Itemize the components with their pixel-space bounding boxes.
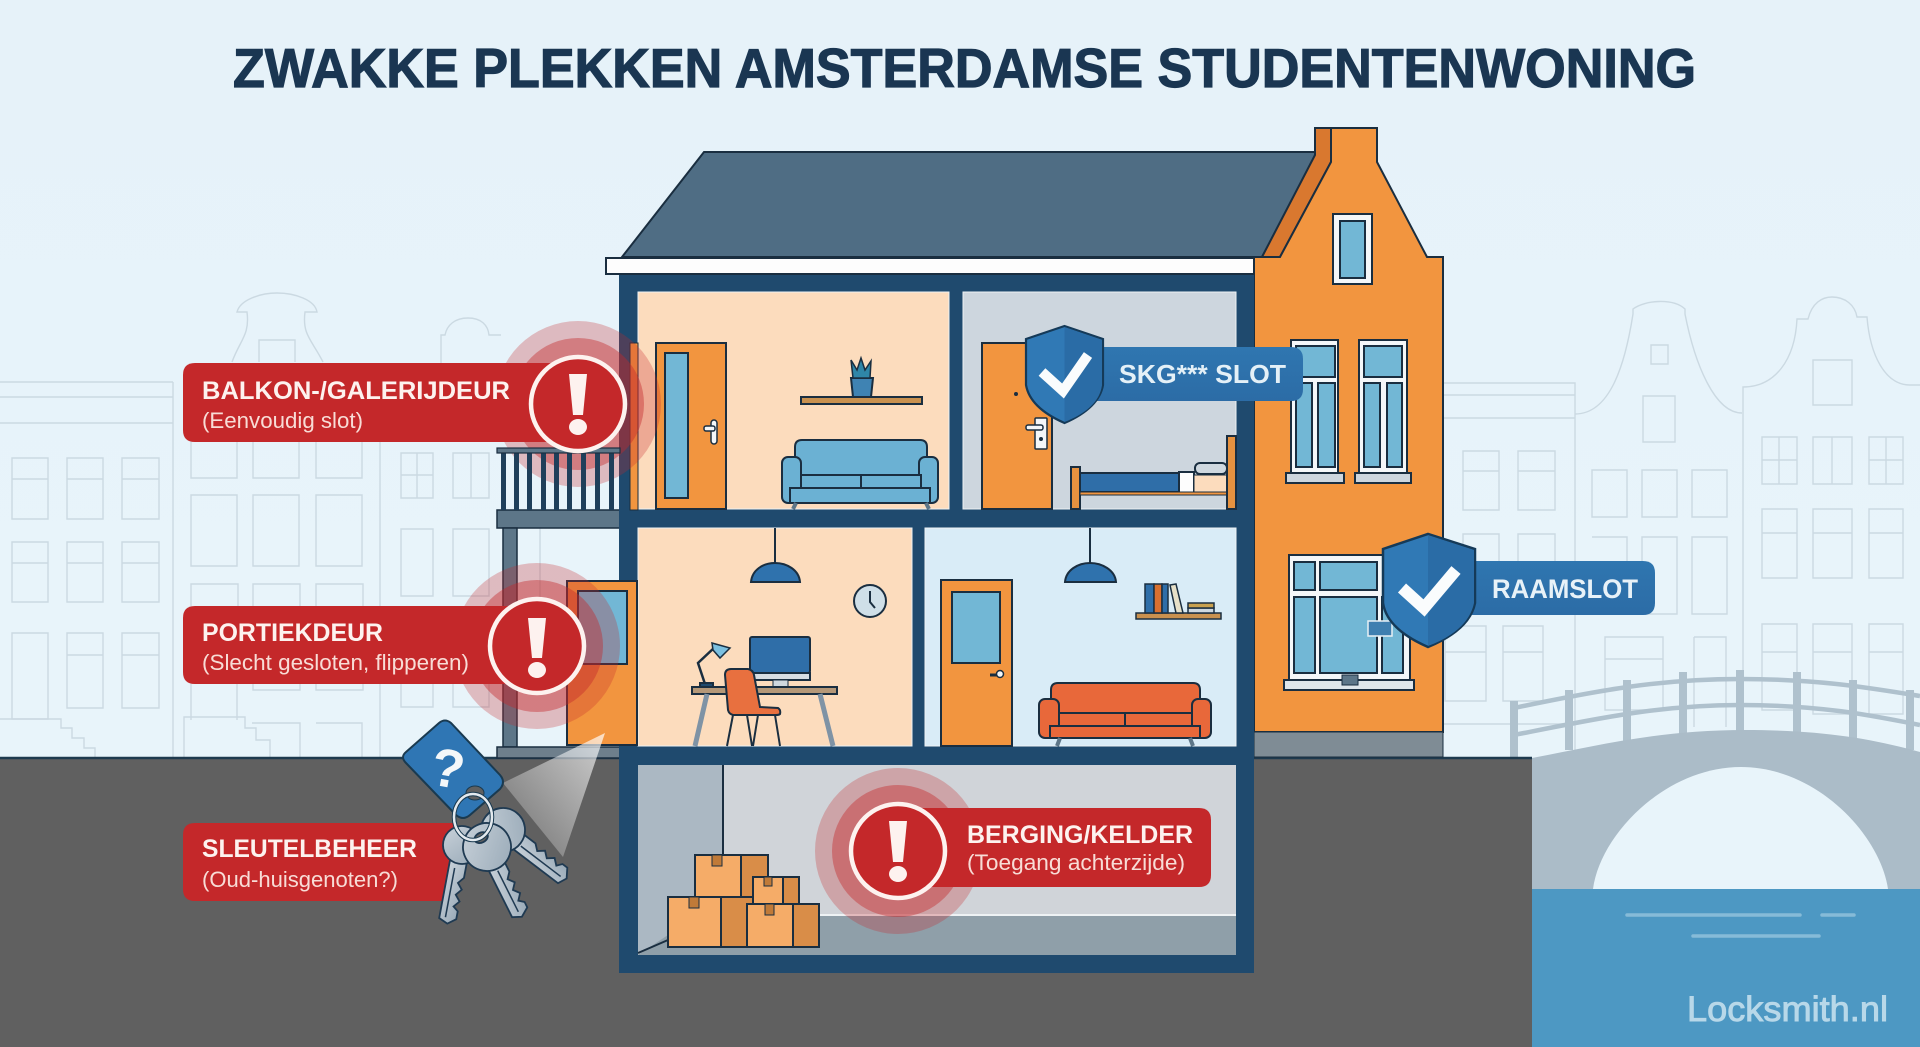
roof <box>622 152 1318 257</box>
room: middle left <box>638 528 912 746</box>
callout: raamslot <box>1383 534 1655 647</box>
middle right room furniture <box>941 528 1221 746</box>
room: middle right <box>925 528 1236 746</box>
room: upper right <box>963 292 1236 509</box>
orange sofa <box>1039 683 1211 746</box>
callout: berging/kelder: BERGING/KELDER <box>967 821 1193 849</box>
upper left window <box>1286 340 1344 483</box>
callout: balkon-/galerijdeur: BALKON-/GALERIJDEUR <box>202 377 510 405</box>
icon: keys with question tag <box>403 720 580 927</box>
icon: shield check <box>1383 534 1475 647</box>
icon: warning portiek <box>490 599 584 693</box>
ceiling lamp <box>751 528 800 582</box>
icon: warning balkon <box>531 357 625 451</box>
brand logo: Locksmith.nl <box>1687 990 1888 1029</box>
callout: portiekdeur <box>183 599 584 693</box>
orange gable building <box>1254 128 1443 757</box>
title: ZWAKKE PLEKKEN AMSTERDAMSE STUDENTENWONING <box>233 37 1696 99</box>
alert glow: berging <box>815 768 981 934</box>
white cornice <box>606 258 1254 274</box>
room: basement <box>638 765 1236 955</box>
door <box>941 580 1012 746</box>
blue sofa <box>782 440 938 509</box>
callout: berging/kelder <box>851 804 1211 898</box>
light cone <box>503 733 605 857</box>
key tag: ? <box>426 737 469 801</box>
callout: SKG slot <box>1026 326 1303 423</box>
book shelf <box>1136 584 1221 619</box>
door <box>656 343 726 509</box>
portiek door <box>567 581 637 745</box>
balcony railing <box>497 448 620 510</box>
house structure with rooms <box>606 258 1254 973</box>
alert glow: portiek <box>454 563 620 729</box>
door with SKG lock <box>982 343 1052 509</box>
key ring <box>454 794 492 840</box>
callout: berging/kelder: (Toegang achterzijde) <box>967 850 1185 875</box>
middle left room furniture <box>692 528 886 746</box>
callout: sleutelbeheer: SLEUTELBEHEER <box>202 835 417 863</box>
alert glow: balkon <box>495 321 661 487</box>
callout: SKG slot: SKG*** SLOT <box>1119 359 1286 389</box>
callout: balkon-/galerijdeur <box>183 357 625 451</box>
door sliver balcony <box>630 343 638 510</box>
background skyline right <box>1443 297 1920 758</box>
callout: balkon-/galerijdeur: (Eenvoudig slot) <box>202 408 363 433</box>
monitor <box>750 637 810 687</box>
clock <box>854 585 886 617</box>
balcony slab and post <box>497 510 620 758</box>
key tag <box>403 720 503 818</box>
key right <box>472 799 580 896</box>
icon: warning berging <box>851 804 945 898</box>
storage boxes <box>668 855 819 947</box>
chair <box>725 669 780 746</box>
background skyline left <box>0 293 540 758</box>
callout: portiekdeur: PORTIEKDEUR <box>202 619 383 647</box>
upper right window <box>1355 340 1411 483</box>
bridge <box>1510 670 1920 889</box>
desk <box>692 687 837 746</box>
callout: raamslot: RAAMSLOT <box>1492 574 1638 604</box>
key middle <box>455 815 543 927</box>
gable window <box>1333 214 1372 284</box>
callout: sleutelbeheer <box>183 823 455 901</box>
street ground <box>0 758 1532 1047</box>
ceiling lamp <box>1065 528 1116 582</box>
room: upper left <box>638 292 949 509</box>
lower window with lock <box>1284 555 1414 690</box>
desk lamp <box>698 643 730 687</box>
shelf with plant <box>801 358 922 404</box>
icon: shield check <box>1026 326 1103 423</box>
key left <box>429 823 484 927</box>
upper right room furniture <box>982 343 1236 509</box>
callout: portiekdeur: (Slecht gesloten, flipperen) <box>202 650 469 675</box>
canal water <box>1532 889 1920 1047</box>
callout: sleutelbeheer: (Oud-huisgenoten?) <box>202 867 398 892</box>
upper left room furniture <box>656 343 938 509</box>
bed <box>1071 436 1236 509</box>
